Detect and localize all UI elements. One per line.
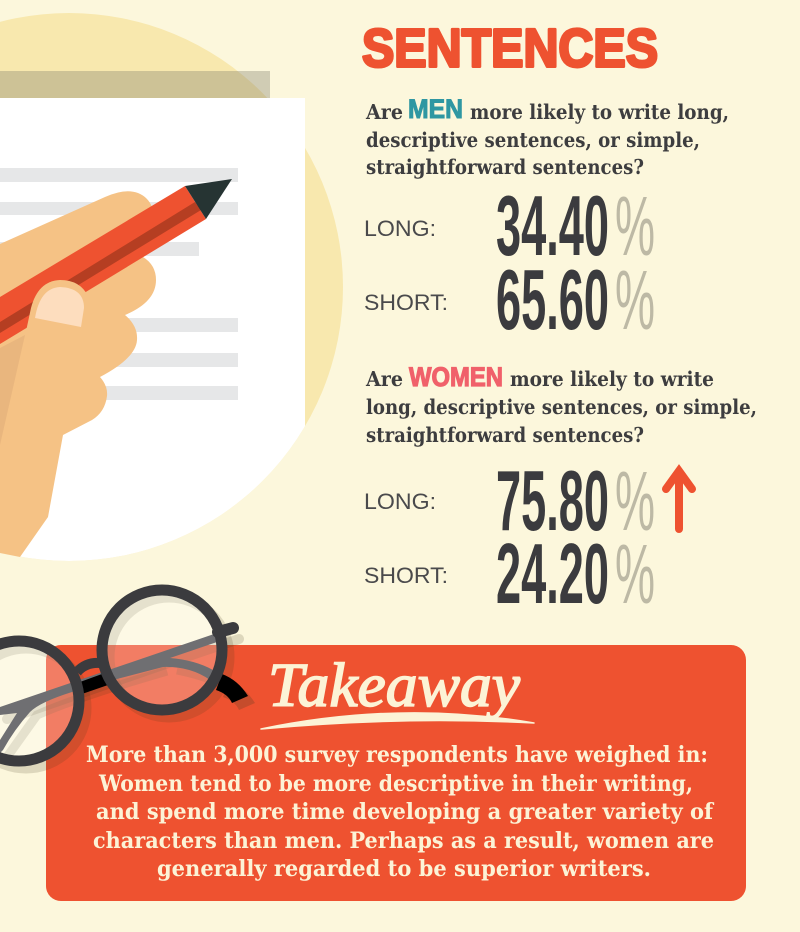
arrow: up	[666, 471, 692, 529]
temple arms	[0, 633, 217, 753]
stat: women long: 75.80	[496, 454, 609, 549]
pencil stripe	[0, 202, 201, 333]
stat: women long: LONG:	[364, 489, 436, 514]
stat: men long: LONG:	[364, 216, 436, 241]
takeaway text: characters than men. Perhaps as a result, women are	[93, 828, 714, 854]
stat: men short: 65.60	[496, 253, 609, 348]
swoosh underline	[261, 713, 534, 729]
question: men: descriptive sentences, or simple,	[366, 128, 700, 152]
paper sheet	[0, 98, 305, 578]
illustration: hand writing on paper	[0, 13, 343, 578]
hand back finger	[0, 191, 152, 345]
paper shadow band	[0, 71, 270, 98]
question: women: WOMEN	[409, 362, 503, 392]
question: women: Are	[365, 367, 403, 391]
stat: women short: SHORT:	[364, 563, 448, 588]
question: women: straightforward sentences?	[366, 423, 644, 447]
takeaway panel	[46, 645, 746, 901]
takeaway text: Women tend to be more descriptive in their writing,	[98, 771, 693, 797]
thumb shade	[0, 335, 25, 445]
heading: SENTENCES	[362, 18, 658, 78]
question: men: Are	[365, 100, 403, 124]
stat: women short: %	[615, 527, 655, 621]
pencil body	[0, 186, 206, 344]
takeaway text: generally regarded to be superior writers.	[157, 856, 651, 882]
stat: men short	[364, 253, 655, 348]
takeaway text: More than 3,000 survey respondents have weighed in:	[86, 742, 708, 768]
lens tint	[106, 594, 218, 706]
question: men: more likely to write long,	[470, 100, 729, 124]
question: women: long, descriptive sentences, or simple,	[366, 395, 757, 419]
stat: men short: SHORT:	[364, 290, 448, 315]
stat: women short: 24.20	[496, 527, 609, 622]
question: women: more likely to write	[510, 367, 714, 391]
stat: women short	[364, 527, 655, 622]
hand palm and fingers	[0, 257, 156, 557]
thumbnail	[35, 287, 84, 327]
background circle	[0, 13, 343, 561]
stat: men long	[364, 179, 655, 274]
stat: men long: 34.40	[496, 179, 609, 274]
rims and bridge	[0, 590, 233, 761]
paper text lines	[0, 168, 238, 400]
far temple	[80, 674, 248, 703]
glasses shadow	[0, 597, 255, 768]
question: men: MEN	[408, 94, 463, 124]
pencil tip	[185, 179, 232, 219]
question: men: straightforward sentences?	[366, 155, 644, 179]
stat: women long	[364, 454, 655, 549]
takeaway text: and spend more time developing a greater variety of	[96, 799, 714, 825]
takeaway script heading: Takeaway	[268, 652, 520, 720]
icon: glasses	[0, 590, 255, 768]
thumb	[20, 280, 100, 410]
stat: women long: %	[615, 454, 655, 548]
stat: men short: %	[615, 253, 655, 347]
stat: men long: %	[615, 179, 655, 273]
